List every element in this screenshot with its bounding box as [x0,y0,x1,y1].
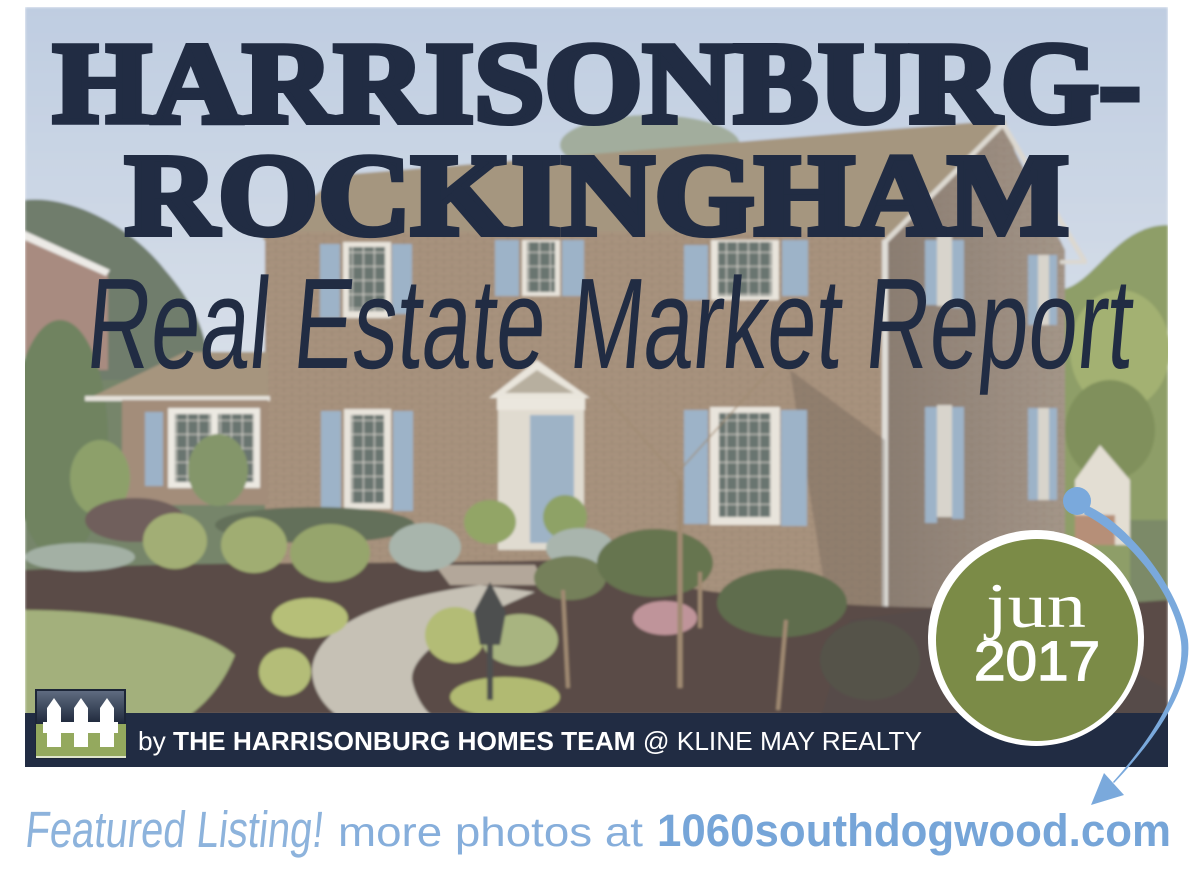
bar text: by THE HARRISONBURG HOMES TEAM @ KLINE MAY REALTY [138,726,922,756]
left yard foliage [25,400,267,572]
mulch ground [25,560,1168,715]
month: jun [984,570,1086,641]
left neighbor house [25,235,108,370]
lower windows [321,405,1057,526]
author bar [25,713,1168,767]
upper windows [320,236,1057,325]
downspout [882,240,888,620]
front lawn [25,610,235,715]
left wing roof [85,352,268,400]
front brick wall [265,232,887,622]
right dark foreground [822,712,1163,713]
entry door and pediment [489,360,590,550]
left wing wall [122,400,268,505]
diagonal wall shadow [790,370,885,620]
gable trim [885,124,1085,262]
title: Harrisonburg-Rockingham: HARRISONBURG- [53,20,1141,148]
subtitle: Real Estate Market Report: Real Estate Market Report [82,251,1139,396]
title: Harrisonburg-Rockingham [53,20,1141,260]
walkway [312,585,535,720]
script label: Featured Listing! [23,802,327,859]
side gable wall [887,128,1065,620]
year: 2017 [974,629,1100,692]
title: Harrisonburg-Rockingham: ROCKINGHAM [125,132,1069,260]
sky [25,7,1168,353]
right background trees [1063,224,1168,588]
left wing window [168,408,260,488]
icon: picket fence logo [35,689,126,759]
lamp post [474,582,506,700]
arrow: from house to listing URL [1063,487,1188,805]
tree behind roof [559,114,740,156]
listing URL: 1060southdogwood.com [657,805,1171,856]
front steps [435,565,545,585]
left tall shrub [25,319,106,546]
date badge: jun 2017 [928,530,1144,746]
background neighbor house [1075,445,1130,545]
featured listing caption [23,802,1171,859]
main roof [262,120,1040,245]
left background tree [25,199,208,400]
young tree trunk and stakes [563,370,786,710]
fence pickets [43,698,118,747]
shrubs [25,434,920,717]
more photos text: more photos at [338,809,644,855]
